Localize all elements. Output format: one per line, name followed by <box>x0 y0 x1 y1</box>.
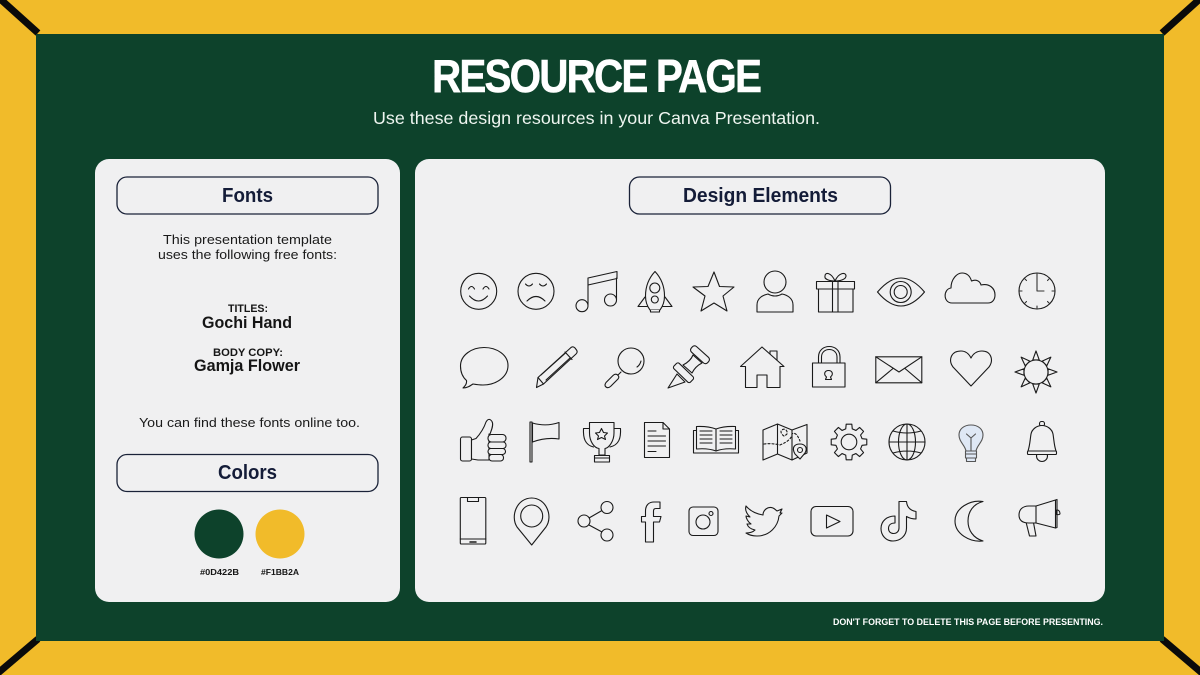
icon: music note <box>576 272 617 312</box>
text: body font: BODY COPY: <box>213 347 283 359</box>
swatch: green: #0D422B <box>200 568 239 577</box>
icon: megaphone <box>1019 500 1060 536</box>
icon: heart <box>951 351 991 386</box>
icon: light bulb <box>959 425 983 462</box>
icon: moon <box>955 501 983 541</box>
panel: design elements <box>415 159 1105 602</box>
icon: person <box>757 271 793 312</box>
icon: smartphone <box>460 498 486 544</box>
corner line: bottom left <box>0 639 38 673</box>
icon: rocket <box>638 272 672 312</box>
icon: twitter <box>746 506 782 536</box>
text: title font: Gochi Hand <box>202 314 292 332</box>
icon: sun <box>1015 351 1057 393</box>
icon: trophy <box>583 422 621 462</box>
heading: colors <box>117 454 378 492</box>
heading: design elements: Design Elements <box>683 185 838 207</box>
corner line: bottom right <box>1162 639 1200 673</box>
icon: pencil <box>536 347 577 388</box>
text: font intro: uses the following free fonts: <box>158 247 337 262</box>
icon: thumbs up <box>460 419 506 461</box>
icon: globe <box>889 424 925 460</box>
footer note: DON'T FORGET TO DELETE THIS PAGE BEFORE PRESENTING. <box>833 617 1103 627</box>
corner line: top right <box>1162 0 1200 33</box>
text: title font <box>202 303 292 332</box>
icon: tiktok <box>881 502 916 541</box>
icon: gear <box>831 424 867 460</box>
text: body font <box>194 347 301 375</box>
icon: envelope <box>876 357 922 383</box>
swatch: yellow <box>256 510 304 577</box>
icon: facebook <box>642 502 661 542</box>
icon: house <box>740 347 784 388</box>
icon: clock <box>1019 273 1055 309</box>
text: font intro: This presentation template <box>163 232 332 247</box>
icon: bell <box>1028 422 1056 462</box>
icon: smiley <box>461 273 497 309</box>
heading: design elements <box>630 177 890 214</box>
icon: sad face <box>518 273 554 309</box>
icon: lock <box>812 346 845 387</box>
text: font intro <box>158 232 337 262</box>
text: title font: TITLES: <box>228 303 268 315</box>
heading: fonts <box>117 177 378 214</box>
icon: open book <box>694 426 738 453</box>
swatch: green <box>194 510 244 577</box>
icon: gift <box>816 273 854 312</box>
title: RESOURCE PAGE <box>432 52 762 103</box>
icon: eye <box>878 278 924 306</box>
icon: instagram <box>689 507 718 536</box>
icon: speech bubble <box>460 348 508 388</box>
icon: document <box>644 422 670 458</box>
text: body font: Gamja Flower <box>194 357 301 375</box>
heading: colors: Colors <box>218 462 277 484</box>
icon: push pin <box>668 345 711 388</box>
icon: youtube <box>811 506 853 536</box>
swatch: yellow: #F1BB2A <box>261 568 299 577</box>
icon: star <box>693 272 734 311</box>
corner line: top left <box>0 0 38 33</box>
icon: map pin <box>514 498 549 545</box>
icon: flag <box>530 422 559 462</box>
text: fonts note: You can find these fonts online too. <box>139 415 360 430</box>
subtitle: Use these design resources in your Canva Presentation. <box>373 108 820 128</box>
icon: map <box>763 424 807 460</box>
panel: fonts and colors <box>95 159 400 602</box>
icon: magnifier <box>605 348 644 388</box>
heading: fonts: Fonts <box>222 185 273 207</box>
icon: share <box>578 502 613 541</box>
icon: cloud <box>945 273 995 303</box>
